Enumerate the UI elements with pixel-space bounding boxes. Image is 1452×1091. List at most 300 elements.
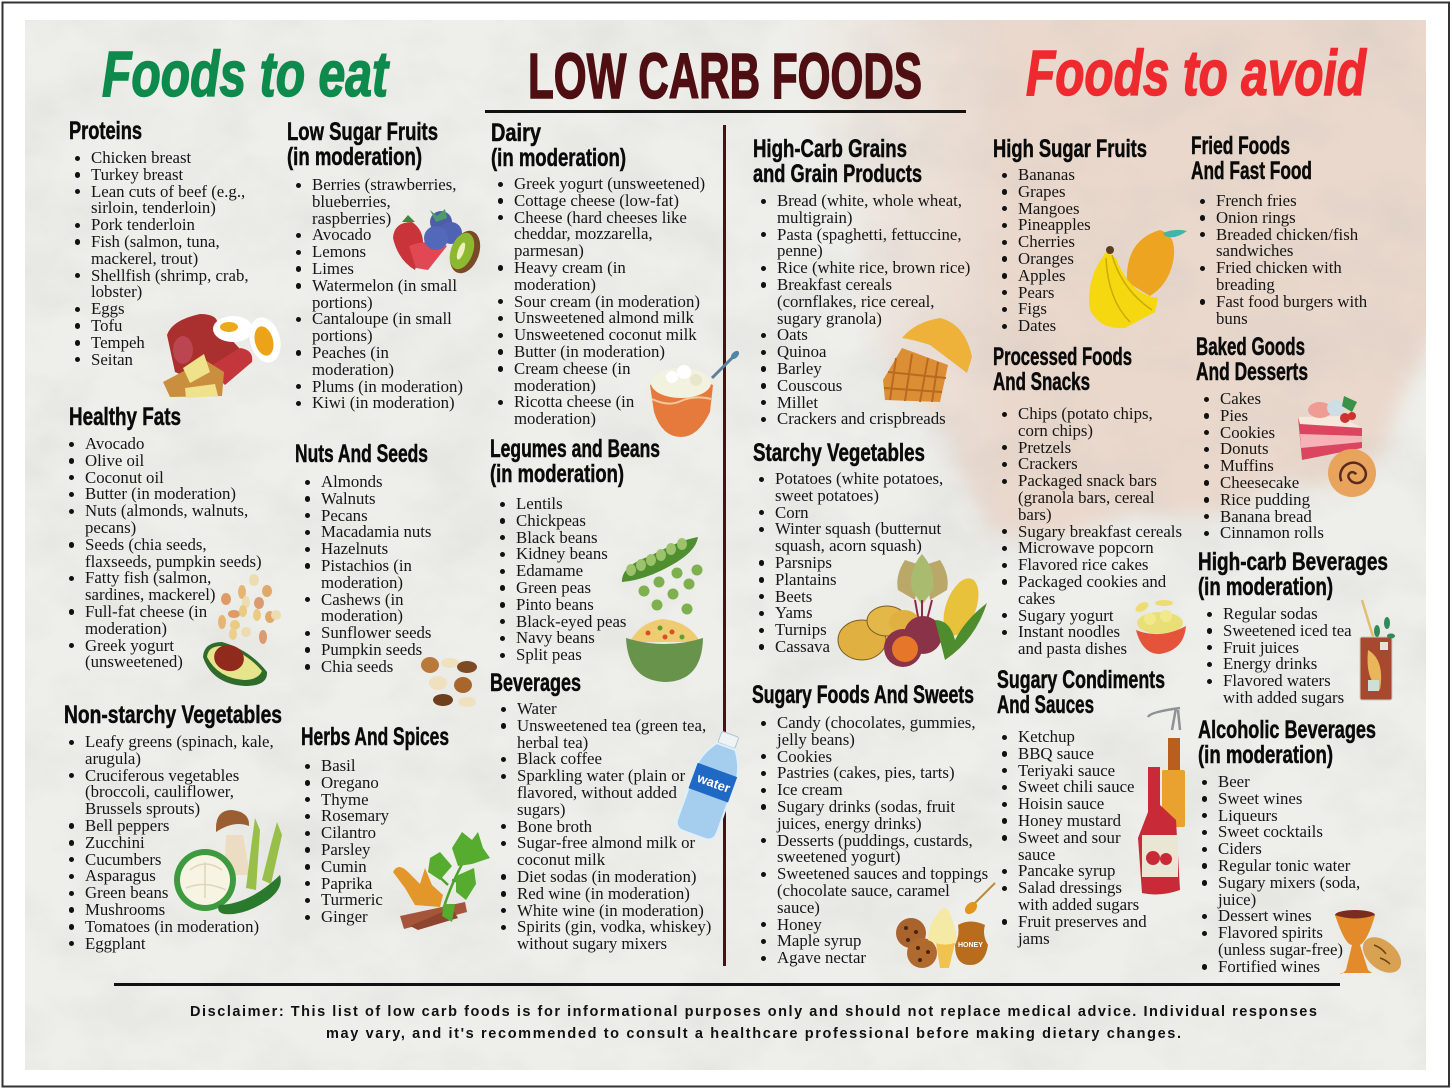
panel: legumes and beans: (in moderation) — [490, 460, 624, 488]
panel: healthy fats: flaxseeds, pumpkin seeds) — [85, 552, 262, 571]
panel: low sugar fruits: portions) — [312, 293, 373, 312]
panel: non-starchy vegetables: arugula) — [85, 749, 141, 768]
panel: high sugar fruits: Grapes — [1018, 182, 1066, 201]
panel: legumes and beans: Legumes and Beans — [490, 435, 660, 463]
panel: sugary condiments and sauces: Pancake syrup — [1018, 861, 1115, 880]
panel: fried foods and fast food: Onion rings — [1216, 208, 1296, 227]
panel: high-carb beverages: Sweetened iced tea — [1223, 621, 1352, 640]
panel: beverages: Sparkling water (plain or — [517, 766, 685, 785]
panel: starchy vegetables: sweet potatoes) — [775, 486, 879, 505]
icon: peas and salad bowl — [622, 537, 703, 682]
panel: high-carb grains: multigrain) — [777, 208, 852, 227]
panel: nuts and seeds: Hazelnuts — [321, 539, 388, 558]
panel: high-carb grains: (cornflakes, rice cereal, — [777, 292, 934, 311]
panel: low sugar fruits: moderation) — [312, 360, 394, 379]
panel: sugary foods and sweets: jelly beans) — [777, 730, 855, 749]
panel: sugary condiments and sauces — [997, 666, 1165, 948]
panel: herbs and spices: Ginger — [321, 907, 368, 926]
panel: alcoholic beverages: Sugary mixers (soda, — [1218, 873, 1360, 892]
panel: proteins: Chicken breast — [91, 148, 191, 167]
panel: sugary foods and sweets: Sugary drinks (sodas, fruit — [777, 797, 955, 816]
panel: dairy — [491, 119, 705, 428]
panel: high-carb beverages: Flavored waters — [1223, 671, 1331, 690]
icon: bananas and mango — [1089, 230, 1187, 328]
panel: beverages: Sugar-free almond milk or — [517, 833, 695, 852]
panel: herbs and spices: Basil — [321, 756, 356, 775]
panel: proteins: Proteins — [69, 117, 142, 145]
panel: legumes and beans: Edamame — [516, 561, 583, 580]
panel: nuts and seeds — [295, 440, 431, 676]
panel: processed foods and snacks: Instant noodles — [1018, 622, 1120, 641]
panel: dairy: Greek yogurt (unsweetened) — [514, 174, 705, 193]
panel: beverages: White wine (in moderation) — [517, 901, 704, 920]
panel: high-carb grains: penne) — [777, 241, 823, 260]
panel: dairy: moderation) — [514, 376, 596, 395]
panel: fried foods and fast food: Breaded chicken/fish — [1216, 225, 1358, 244]
panel: sugary foods and sweets: Pastries (cakes, pies, tarts) — [777, 763, 955, 782]
panel: baked goods and desserts — [1196, 333, 1324, 542]
panel: sugary condiments and sauces: Sweet chili sauce — [1018, 777, 1134, 796]
panel: legumes and beans: Split peas — [516, 645, 582, 664]
panel: legumes and beans: Navy beans — [516, 628, 595, 647]
panel: alcoholic beverages: Fortified wines — [1218, 957, 1320, 976]
title: foods to eat: Foods to eat — [102, 38, 390, 110]
icon: seeds — [218, 574, 281, 644]
panel: starchy vegetables: Starchy Vegetables — [753, 439, 925, 467]
panel: baked goods and desserts: Banana bread — [1220, 507, 1312, 526]
panel: healthy fats: Butter (in moderation) — [85, 484, 236, 503]
panel: starchy vegetables: Cassava — [775, 637, 830, 656]
panel: nuts and seeds: Pistachios (in — [321, 556, 412, 575]
disclaimer — [190, 1004, 1317, 1042]
panel: high-carb grains: Quinoa — [777, 342, 826, 361]
panel: high-carb grains: High-Carb Grains — [753, 135, 907, 163]
panel: proteins: mackerel, trout) — [91, 249, 198, 268]
panel: non-starchy vegetables: Leafy greens (spinach, kale, — [85, 732, 274, 751]
panel: processed foods and snacks: Pretzels — [1018, 438, 1071, 457]
panel: non-starchy vegetables: Green beans — [85, 883, 168, 902]
panel: herbs and spices: Herbs And Spices — [301, 723, 449, 751]
panel: high-carb grains: Couscous — [777, 376, 842, 395]
panel: beverages: Diet sodas (in moderation) — [517, 867, 696, 886]
panel: fried foods and fast food: French fries — [1216, 191, 1297, 210]
panel: fried foods and fast food: Fried Foods — [1191, 132, 1290, 160]
panel: dairy: cheddar, mozzarella, — [514, 224, 653, 243]
panel: alcoholic beverages: Flavored spirits — [1218, 923, 1323, 942]
panel: processed foods and snacks: Packaged cookies and — [1018, 572, 1166, 591]
panel: high-carb grains: Millet — [777, 393, 818, 412]
panel: sugary foods and sweets: juices, energy drinks) — [777, 814, 922, 833]
icon: ginger, parsley, cinnamon — [393, 832, 490, 930]
panel: healthy fats: Full-fat cheese (in — [85, 602, 207, 621]
panel: fried foods and fast food: buns — [1216, 309, 1248, 328]
panel: low sugar fruits: (in moderation) — [287, 143, 422, 171]
panel: high-carb beverages: Regular sodas — [1223, 604, 1318, 623]
panel: baked goods and desserts: Pies — [1220, 406, 1248, 425]
panel: processed foods and snacks: and pasta dishes — [1018, 639, 1127, 658]
panel: healthy fats: Fatty fish (salmon, — [85, 568, 211, 587]
panel: processed foods and snacks: And Snacks — [993, 368, 1090, 396]
panel: high-carb grains: Rice (white rice, brown rice) — [777, 258, 970, 277]
panel: processed foods and snacks: Crackers — [1018, 454, 1078, 473]
panel: proteins: Eggs — [91, 299, 125, 318]
panel: alcoholic beverages: Ciders — [1218, 839, 1262, 858]
panel: high sugar fruits: Mangoes — [1018, 199, 1080, 218]
panel: sugary condiments and sauces: And Sauces — [997, 691, 1094, 719]
panel: sugary foods and sweets: Candy (chocolates, gummies, — [777, 713, 976, 732]
panel: herbs and spices: Cumin — [321, 857, 367, 876]
panel: alcoholic beverages: Alcoholic Beverages — [1198, 716, 1376, 744]
panel: processed foods and snacks: Processed Foods — [993, 343, 1132, 371]
panel: low sugar fruits: Watermelon (in small — [312, 276, 457, 295]
icon: cake and cinnamon roll — [1298, 396, 1376, 497]
panel: legumes and beans: Green peas — [516, 578, 591, 597]
panel: alcoholic beverages: Liqueurs — [1218, 806, 1278, 825]
panel: high-carb beverages — [1198, 548, 1388, 707]
panel: alcoholic beverages — [1198, 716, 1376, 976]
panel: starchy vegetables: Winter squash (butternut — [775, 519, 941, 538]
panel: processed foods and snacks: Packaged snack bars — [1018, 471, 1157, 490]
panel: nuts and seeds: Pecans — [321, 506, 368, 525]
panel: dairy: Cottage cheese (low-fat) — [514, 191, 679, 210]
panel: legumes and beans: Lentils — [516, 494, 563, 513]
panel: legumes and beans: Black beans — [516, 528, 598, 547]
panel: starchy vegetables: squash, acorn squash) — [775, 536, 922, 555]
panel: high-carb grains: sugary granola) — [777, 309, 882, 328]
panel: alcoholic beverages: Sweet cocktails — [1218, 822, 1323, 841]
panel: nuts and seeds: moderation) — [321, 606, 403, 625]
icon: croissant and waffle — [883, 318, 972, 402]
panel: healthy fats: Olive oil — [85, 451, 144, 470]
icon: mixed nuts — [421, 657, 477, 707]
disclaimer: Disclaimer: This list of low carb foods is for informational purposes only and should not replace medical advice. Individual responses — [190, 1004, 1317, 1020]
panel: fried foods and fast food: And Fast Food — [1191, 157, 1312, 185]
panel: high-carb beverages: Fruit juices — [1223, 638, 1299, 657]
panel: proteins: Seitan — [91, 350, 133, 369]
panel: high sugar fruits: Apples — [1018, 266, 1066, 285]
panel: herbs and spices: Turmeric — [321, 890, 383, 909]
panel: non-starchy vegetables: (broccoli, cauliflower, — [85, 782, 234, 801]
panel: baked goods and desserts: Donuts — [1220, 439, 1268, 458]
panel: proteins: Shellfish (shrimp, crab, — [91, 266, 249, 285]
panel: starchy vegetables: Turnips — [775, 620, 827, 639]
panel: alcoholic beverages: Regular tonic water — [1218, 856, 1350, 875]
panel: high-carb grains: Crackers and crispbreads — [777, 409, 946, 428]
panel: high sugar fruits: Pears — [1018, 283, 1054, 302]
panel: baked goods and desserts: Cookies — [1220, 423, 1275, 442]
panel: healthy fats: pecans) — [85, 518, 136, 537]
panel: sugary condiments and sauces: jams — [1018, 929, 1050, 948]
panel: processed foods and snacks: Chips (potato chips, — [1018, 404, 1153, 423]
panel: sugary condiments and sauces: Sweet and sour — [1018, 828, 1121, 847]
panel: high sugar fruits: Dates — [1018, 316, 1056, 335]
panel: low sugar fruits: Peaches (in — [312, 343, 389, 362]
panel: alcoholic beverages: juice) — [1218, 890, 1256, 909]
panel: alcoholic beverages: Dessert wines — [1218, 906, 1312, 925]
panel: starchy vegetables — [753, 439, 943, 656]
panel: healthy fats: Coconut oil — [85, 468, 164, 487]
panel: starchy vegetables: Yams — [775, 603, 812, 622]
panel: starchy vegetables: Potatoes (white potatoes, — [775, 469, 943, 488]
icon: water bottle: water — [694, 770, 732, 796]
panel: non-starchy vegetables: Mushrooms — [85, 900, 165, 919]
panel: sugary foods and sweets: Cookies — [777, 747, 832, 766]
icon: iced tea — [1360, 600, 1395, 700]
panel: low sugar fruits: Low Sugar Fruits — [287, 118, 438, 146]
panel: low sugar fruits: Cantaloupe (in small — [312, 309, 452, 328]
icon: popcorn bowl — [1134, 600, 1186, 654]
panel: sugary foods and sweets: Agave nectar — [777, 948, 866, 967]
panel: sugary condiments and sauces: Salad dressings — [1018, 878, 1122, 897]
panel: herbs and spices: Parsley — [321, 840, 370, 859]
panel: herbs and spices: Thyme — [321, 790, 369, 809]
panel: high-carb grains: Barley — [777, 359, 822, 378]
panel: legumes and beans — [490, 435, 660, 664]
panel: baked goods and desserts: Rice pudding — [1220, 490, 1310, 509]
panel: proteins: lobster) — [91, 282, 142, 301]
panel: beverages: Beverages — [490, 669, 581, 697]
panel: non-starchy vegetables: Bell peppers — [85, 816, 169, 835]
panel: alcoholic beverages: (unless sugar-free) — [1218, 940, 1343, 959]
panel: non-starchy vegetables: Non-starchy Vegetables — [64, 701, 282, 729]
panel: dairy: Unsweetened coconut milk — [514, 325, 697, 344]
icon: meat, eggs and tofu — [163, 314, 285, 398]
panel: sugary condiments and sauces: Teriyaki sauce — [1018, 761, 1115, 780]
panel: healthy fats: Avocado — [85, 434, 144, 453]
panel: baked goods and desserts: And Desserts — [1196, 358, 1308, 386]
panel: sugary foods and sweets: Honey — [777, 915, 822, 934]
panel: beverages: Bone broth — [517, 817, 592, 836]
panel: healthy fats: sardines, mackerel) — [85, 585, 215, 604]
panel: herbs and spices: Cilantro — [321, 823, 376, 842]
panel: nuts and seeds: Walnuts — [321, 489, 376, 508]
panel: low sugar fruits: Avocado — [312, 225, 371, 244]
icon: jigger and bread — [1335, 910, 1408, 980]
panel: alcoholic beverages: Beer — [1218, 772, 1250, 791]
panel: sugary condiments and sauces: with added sugars — [1018, 895, 1139, 914]
panel: high-carb beverages: with added sugars — [1223, 688, 1344, 707]
panel: sugary foods and sweets: sauce) — [777, 898, 820, 917]
panel: high sugar fruits: Bananas — [1018, 165, 1075, 184]
panel: sugary foods and sweets: Desserts (puddings, custards, — [777, 831, 973, 850]
panel: sugary foods and sweets — [752, 681, 988, 967]
title: low carb foods: LOW CARB FOODS — [528, 40, 922, 112]
panel: proteins: Lean cuts of beef (e.g., — [91, 182, 245, 201]
panel: non-starchy vegetables: Eggplant — [85, 934, 146, 953]
panel: dairy: Unsweetened almond milk — [514, 308, 694, 327]
panel: baked goods and desserts: Cheesecake — [1220, 473, 1299, 492]
panel: beverages — [490, 669, 711, 953]
panel: sugary condiments and sauces: Ketchup — [1018, 727, 1075, 746]
panel: high-carb beverages: (in moderation) — [1198, 573, 1333, 601]
panel: high sugar fruits: Pineapples — [1018, 215, 1091, 234]
panel: high-carb grains: Oats — [777, 325, 808, 344]
panel: nuts and seeds: Macadamia nuts — [321, 522, 431, 541]
panel: processed foods and snacks: cakes — [1018, 589, 1055, 608]
panel: sugary foods and sweets: Sugary Foods And Sweets — [752, 681, 974, 709]
panel: sugary foods and sweets: Maple syrup — [777, 931, 861, 950]
panel: beverages: Spirits (gin, vodka, whiskey) — [517, 917, 711, 936]
panel: sugary condiments and sauces: BBQ sauce — [1018, 744, 1094, 763]
panel: high-carb grains: and Grain Products — [753, 160, 922, 188]
panel: healthy fats: Healthy Fats — [69, 403, 181, 431]
panel: dairy: moderation) — [514, 275, 596, 294]
panel: processed foods and snacks: bars) — [1018, 505, 1052, 524]
panel: sugary foods and sweets: sweetened yogurt) — [777, 847, 900, 866]
panel: baked goods and desserts: Baked Goods — [1196, 333, 1305, 361]
panel: starchy vegetables: Corn — [775, 503, 809, 522]
panel: healthy fats: Greek yogurt — [85, 636, 174, 655]
panel: herbs and spices: Oregano — [321, 773, 379, 792]
panel: sugary condiments and sauces: sauce — [1018, 845, 1055, 864]
panel: alcoholic beverages: Sweet wines — [1218, 789, 1302, 808]
panel: dairy: Sour cream (in moderation) — [514, 292, 700, 311]
panel: non-starchy vegetables: Cruciferous vegetables — [85, 766, 239, 785]
panel: dairy: Butter (in moderation) — [514, 342, 665, 361]
panel: baked goods and desserts: Cakes — [1220, 389, 1261, 408]
panel: processed foods and snacks: (granola bars, cereal — [1018, 488, 1154, 507]
panel: nuts and seeds: Cashews (in — [321, 590, 404, 609]
panel: high-carb grains: Breakfast cereals — [777, 275, 892, 294]
panel: high sugar fruits: Figs — [1018, 299, 1047, 318]
panel: high-carb beverages: Energy drinks — [1223, 654, 1317, 673]
panel: non-starchy vegetables: Asparagus — [85, 866, 156, 885]
panel: legumes and beans: Pinto beans — [516, 595, 594, 614]
panel: fried foods and fast food: breading — [1216, 275, 1275, 294]
panel: processed foods and snacks: Sugary yogurt — [1018, 606, 1114, 625]
panel: non-starchy vegetables: Cucumbers — [85, 850, 161, 869]
panel: processed foods and snacks: Flavored rice cakes — [1018, 555, 1148, 574]
icon: avocado — [203, 642, 267, 686]
panel: healthy fats — [69, 403, 262, 671]
panel: alcoholic beverages: (in moderation) — [1198, 741, 1333, 769]
panel: fried foods and fast food: Fast food burgers with — [1216, 292, 1367, 311]
panel: proteins: Pork tenderloin — [91, 215, 195, 234]
panel: proteins: Tempeh — [91, 333, 145, 352]
panel: high-carb grains — [753, 135, 970, 428]
panel: herbs and spices: Paprika — [321, 874, 372, 893]
panel: beverages: coconut milk — [517, 850, 605, 869]
panel: dairy: Dairy — [491, 119, 541, 147]
panel: dairy: (in moderation) — [491, 144, 626, 172]
panel: starchy vegetables: Plantains — [775, 570, 837, 589]
panel: sugary condiments and sauces: Honey mustard — [1018, 811, 1121, 830]
panel: beverages: Red wine (in moderation) — [517, 884, 690, 903]
panel: processed foods and snacks: corn chips) — [1018, 421, 1093, 440]
panel: dairy: Cheese (hard cheeses like — [514, 208, 687, 227]
panel: high-carb grains: Bread (white, whole wheat, — [777, 191, 962, 210]
panel: low sugar fruits: Limes — [312, 259, 354, 278]
panel: proteins: Tofu — [91, 316, 122, 335]
panel: fried foods and fast food — [1191, 132, 1367, 328]
panel: non-starchy vegetables: Tomatoes (in moderation) — [85, 917, 259, 936]
panel: legumes and beans: Black-eyed peas — [516, 612, 626, 631]
panel: sugary condiments and sauces: Sugary Condiments — [997, 666, 1165, 694]
panel: beverages: Black coffee — [517, 749, 602, 768]
panel: beverages: herbal tea) — [517, 733, 588, 752]
panel: non-starchy vegetables — [64, 701, 282, 953]
panel: fried foods and fast food: sandwiches — [1216, 241, 1293, 260]
icon: cottage cheese bowl — [650, 349, 741, 437]
panel: low sugar fruits: Kiwi (in moderation) — [312, 393, 455, 412]
panel: legumes and beans: Chickpeas — [516, 511, 586, 530]
icon: ketchup and mustard — [1138, 708, 1185, 894]
panel: sugary condiments and sauces: Hoisin sauce — [1018, 794, 1104, 813]
panel: high-carb grains: Pasta (spaghetti, fettuccine, — [777, 225, 962, 244]
panel: nuts and seeds: Pumpkin seeds — [321, 640, 422, 659]
panel: proteins: sirloin, tenderloin) — [91, 198, 216, 217]
panel: processed foods and snacks: Microwave popcorn — [1018, 538, 1154, 557]
panel: beverages: Unsweetened tea (green tea, — [517, 716, 706, 735]
panel: sugary foods and sweets: (chocolate sauce, caramel — [777, 881, 950, 900]
panel: dairy: Ricotta cheese (in — [514, 392, 634, 411]
panel: non-starchy vegetables: Brussels sprouts) — [85, 799, 200, 818]
panel: dairy: Heavy cream (in — [514, 258, 626, 277]
panel: beverages: Water — [517, 699, 557, 718]
panel: beverages: flavored, without added — [517, 783, 677, 802]
panel: dairy: Cream cheese (in — [514, 359, 630, 378]
panel: processed foods and snacks: Sugary breakfast cereals — [1018, 522, 1182, 541]
panel: sugary foods and sweets: Sweetened sauces and toppings — [777, 864, 988, 883]
panel: beverages: sugars) — [517, 800, 565, 819]
panel: legumes and beans: Kidney beans — [516, 544, 608, 563]
icon: water bottle — [674, 727, 750, 842]
panel: high-carb beverages: High-carb Beverages — [1198, 548, 1388, 576]
panel: high sugar fruits — [993, 135, 1147, 335]
panel: nuts and seeds: Nuts And Seeds — [295, 440, 428, 468]
panel: high sugar fruits: High Sugar Fruits — [993, 135, 1147, 163]
panel: low sugar fruits: Plums (in moderation) — [312, 377, 463, 396]
panel: starchy vegetables: Beets — [775, 587, 812, 606]
panel: low sugar fruits: Lemons — [312, 242, 366, 261]
icon: starchy vegetables — [838, 554, 987, 667]
panel: baked goods and desserts: Muffins — [1220, 456, 1274, 475]
panel: nuts and seeds: Sunflower seeds — [321, 623, 431, 642]
panel: proteins — [69, 117, 249, 369]
icon: cookies, ice cream and honey — [896, 883, 995, 968]
panel: sugary foods and sweets: Ice cream — [777, 780, 843, 799]
panel: nuts and seeds: moderation) — [321, 573, 403, 592]
panel: starchy vegetables: Parsnips — [775, 553, 832, 572]
panel: dairy: parmesan) — [514, 241, 584, 260]
panel: healthy fats: moderation) — [85, 619, 167, 638]
panel: low sugar fruits: portions) — [312, 326, 373, 345]
panel: baked goods and desserts: Cinnamon rolls — [1220, 523, 1324, 542]
icon: cauliflower, mushroom, asparagus, zucchini — [174, 810, 282, 914]
panel: proteins: Turkey breast — [91, 165, 183, 184]
panel: nuts and seeds: Chia seeds — [321, 657, 393, 676]
panel: proteins: Fish (salmon, tuna, — [91, 232, 220, 251]
panel: high sugar fruits: Cherries — [1018, 232, 1075, 251]
panel: beverages: without sugary mixers — [517, 934, 667, 953]
panel: herbs and spices: Rosemary — [321, 806, 389, 825]
panel: healthy fats: Seeds (chia seeds, — [85, 535, 207, 554]
panel: dairy: moderation) — [514, 409, 596, 428]
panel: nuts and seeds: Almonds — [321, 472, 383, 491]
panel: low sugar fruits: Berries (strawberries, — [312, 175, 456, 194]
panel: processed foods and snacks — [993, 343, 1182, 658]
panel: healthy fats: Nuts (almonds, walnuts, — [85, 501, 248, 520]
panel: herbs and spices — [301, 723, 449, 926]
panel: sugary condiments and sauces: Fruit preserves and — [1018, 912, 1147, 931]
panel: fried foods and fast food: Fried chicken with — [1216, 258, 1342, 277]
panel: low sugar fruits: blueberries, — [312, 192, 391, 211]
panel: low sugar fruits — [287, 118, 463, 412]
panel: non-starchy vegetables: Zucchini — [85, 833, 145, 852]
panel: healthy fats: (unsweetened) — [85, 652, 183, 671]
disclaimer: may vary, and it's recommended to consult a healthcare professional before making dietary changes. — [326, 1026, 1181, 1042]
icon: berries and kiwi — [393, 209, 486, 277]
